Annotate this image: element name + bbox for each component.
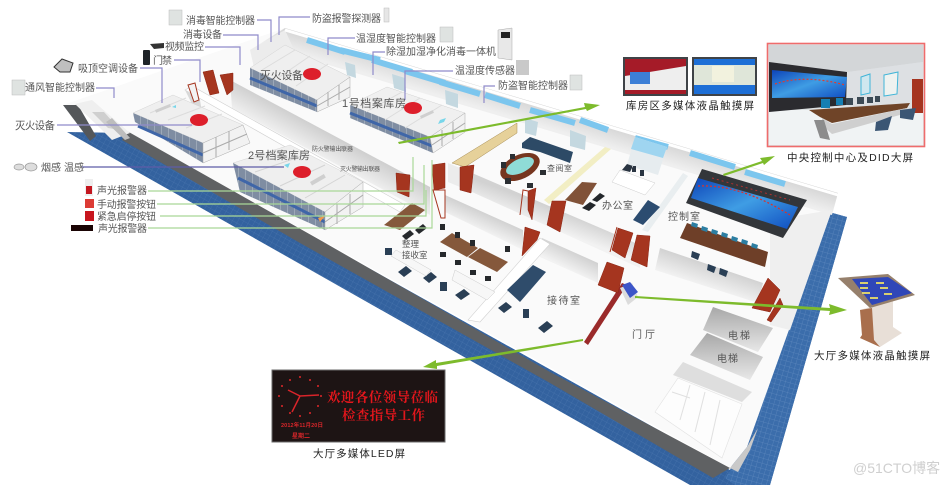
device labels: 消毒智能控制器	[186, 14, 255, 27]
archive rack: upper left	[250, 45, 350, 112]
lobby touch screen	[620, 282, 638, 305]
icon: sound-light alarm	[85, 179, 93, 196]
device labels: 除湿加湿净化消毒一体机	[386, 45, 496, 58]
panel: lobby touch kiosk	[814, 274, 931, 362]
room labels: 2号档案库房	[248, 148, 310, 162]
icon: ceiling air conditioner	[54, 59, 73, 72]
device labels: 手动报警按钮	[97, 198, 156, 211]
wall posters and door	[861, 74, 870, 95]
panel: central control photo	[768, 44, 924, 146]
watermark: @51CTO博客	[853, 460, 940, 476]
control room video wall	[686, 169, 807, 238]
control room desk	[680, 222, 768, 277]
monitors	[821, 98, 843, 108]
front grey plinth	[122, 131, 730, 478]
device labels: 烟感	[41, 161, 61, 174]
icon: ventilation controller	[12, 80, 25, 95]
video wall in photo	[769, 62, 847, 112]
icon: anti-theft controller	[570, 75, 582, 90]
room labels: 门厅	[632, 328, 655, 341]
archive rack: left	[133, 95, 250, 163]
elevators and stairs	[655, 307, 773, 458]
device labels: 防盗报警探测器	[312, 12, 381, 25]
room labels	[248, 68, 750, 365]
icon: alarm sign	[71, 225, 93, 231]
panel: lobby LED screen: 检查指导工作	[342, 407, 426, 423]
panel: lobby LED screen: 星期二	[292, 432, 310, 440]
panel: lobby LED screen	[272, 370, 445, 442]
top left device icons	[12, 8, 582, 231]
device labels: 声光报警器	[97, 184, 147, 197]
device labels: 温湿度智能控制器	[356, 32, 436, 45]
room labels: 电梯	[728, 329, 750, 342]
icon: manual alarm button	[85, 199, 94, 208]
fire suppression units	[190, 68, 422, 178]
room labels: 控制室	[668, 210, 700, 223]
icon: access control	[143, 50, 150, 65]
room labels: 灭火警输出联器	[340, 165, 380, 173]
chairs	[875, 116, 892, 131]
room labels: 接收室	[402, 250, 428, 260]
icon: humidity controller	[440, 27, 453, 42]
device labels: 消毒设备	[183, 28, 222, 41]
caption: LED screen: 大厅多媒体LED屏	[313, 447, 406, 460]
room labels: 查阅室	[547, 163, 572, 173]
device labels: 温湿度传感器	[455, 64, 515, 77]
callout lines: device labels	[57, 17, 495, 228]
building floor plan	[63, 28, 838, 478]
room labels: 接待室	[547, 294, 580, 307]
panel: warehouse touch screens	[623, 57, 757, 112]
device labels: 灭火设备	[15, 119, 56, 132]
control desk	[809, 103, 910, 123]
device labels: 紧急启停按钮	[97, 210, 156, 223]
date: 2012年11月20日	[281, 421, 323, 429]
caption: 库房区多媒体液晶触摸屏	[626, 99, 755, 112]
device labels: 防盗智能控制器	[498, 79, 568, 92]
archive rack: no. 2	[233, 145, 363, 230]
caption: 大厅多媒体液晶触摸屏	[814, 349, 931, 362]
caption: central control: 中央控制中心及DID大屏	[787, 151, 914, 164]
device labels	[15, 12, 568, 235]
device labels: 声光报警器	[98, 222, 147, 235]
icon: dehumidifier cabinet	[498, 28, 512, 60]
device labels: 吸顶空调设备	[78, 62, 138, 75]
red touch screen	[623, 57, 688, 96]
device labels: 通风智能控制器	[25, 81, 95, 94]
welcome message: 欢迎各位领导莅临	[327, 389, 438, 405]
device labels: 视频监控	[165, 40, 204, 53]
analog clock	[278, 376, 322, 417]
device labels: 门禁	[153, 54, 172, 67]
blue ground plane	[67, 132, 847, 485]
icon: emergency stop button	[85, 211, 94, 221]
icon: disinfection controller	[169, 10, 182, 25]
icon: camera	[150, 43, 164, 49]
processing room furniture	[384, 203, 510, 300]
room labels: 电梯	[717, 352, 738, 365]
reception sofa and desk	[498, 265, 553, 333]
room labels: 办公室	[602, 199, 633, 212]
back wall	[250, 28, 838, 215]
reading room furniture	[496, 137, 573, 188]
green arrows	[398, 103, 847, 369]
doors	[188, 70, 783, 322]
icon: humidity sensor	[516, 60, 529, 75]
office furniture	[565, 164, 660, 225]
blue touch screen	[692, 57, 757, 96]
partition walls	[185, 80, 832, 345]
room labels: 1号档案库房	[342, 96, 406, 110]
archive rack: no. 1	[350, 87, 465, 153]
floor slab	[63, 28, 838, 468]
icon: intrusion detector	[384, 8, 389, 22]
room labels: 整理	[402, 239, 420, 249]
room labels: 防火警输出联器	[312, 145, 353, 153]
icon: smoke and temperature detectors	[14, 163, 37, 171]
shelving in reading room	[452, 123, 517, 167]
left entrance panels	[63, 100, 130, 141]
device labels: 温感	[64, 161, 84, 174]
room labels: 灭火设备	[260, 68, 303, 82]
